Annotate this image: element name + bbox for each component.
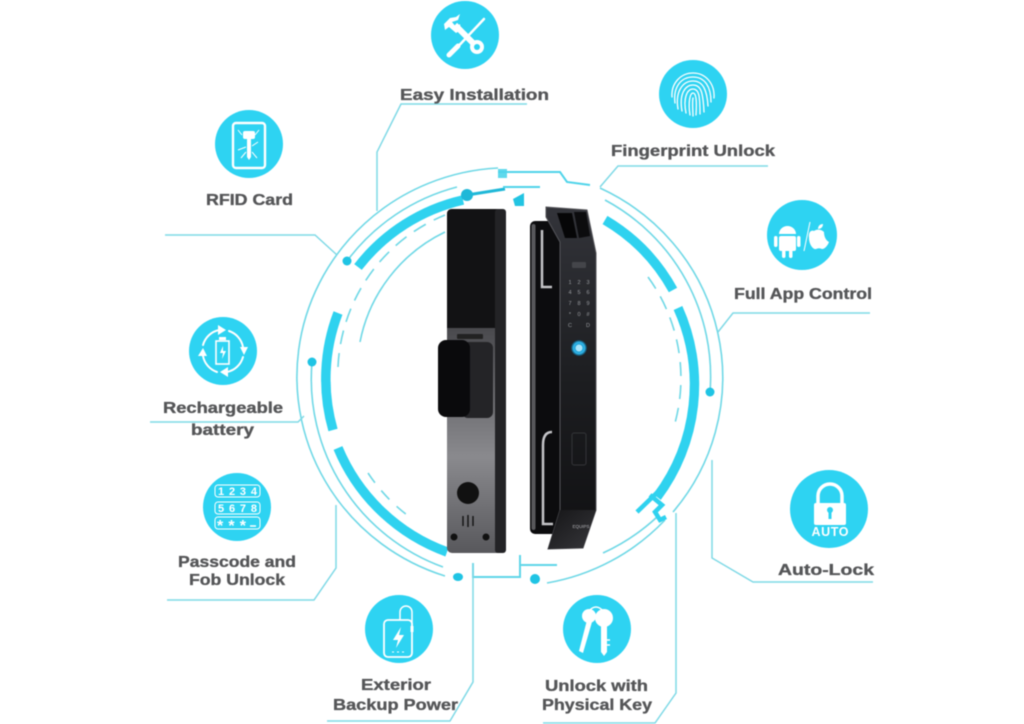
feature: unlock with physical key	[542, 595, 652, 714]
feature: unlock with physical key: Physical Key	[542, 697, 652, 714]
feature: full app control	[734, 200, 872, 303]
icon: power bank	[365, 595, 433, 663]
label: RFID Card	[206, 192, 293, 209]
icon: battery with cycle arrows	[189, 317, 257, 385]
product: exterior lock with fingerprint reader: 6	[586, 290, 590, 296]
product: exterior lock with fingerprint reader: D	[586, 323, 590, 329]
label: Full App Control	[734, 286, 872, 303]
feature: passcode and fob unlock: Fob Unlock	[189, 572, 285, 589]
label: Easy Installation	[400, 87, 549, 104]
feature: fingerprint unlock	[611, 60, 775, 160]
product: exterior lock with fingerprint reader: 4	[568, 290, 572, 296]
icon: keypad: 1234	[218, 486, 258, 498]
product: exterior lock with fingerprint reader: 8	[577, 301, 581, 307]
product: exterior lock with fingerprint reader: 5	[577, 290, 581, 296]
circuit ring graphic	[297, 168, 723, 584]
icon: android and apple	[767, 200, 837, 270]
label: Fingerprint Unlock	[611, 143, 775, 160]
product: exterior lock with fingerprint reader: 9	[586, 301, 590, 307]
product: exterior lock with fingerprint reader: 3	[586, 280, 590, 286]
label: Rechargeable	[163, 400, 283, 417]
product: interior lock panel	[438, 209, 506, 553]
icon: two keys	[563, 595, 631, 663]
product: exterior lock with fingerprint reader: *	[569, 312, 572, 318]
product: exterior lock with fingerprint reader	[530, 207, 596, 549]
feature: passcode and fob unlock	[178, 473, 296, 589]
feature: exterior backup power	[333, 595, 458, 714]
icon: keypad: 5678	[218, 503, 257, 515]
product: exterior lock with fingerprint reader: #	[586, 312, 590, 318]
feature: rechargeable battery: battery	[191, 422, 254, 439]
product: exterior lock with fingerprint reader: C	[568, 323, 572, 329]
product: exterior lock with fingerprint reader: 1	[568, 280, 572, 286]
product: exterior lock with fingerprint reader: 0	[577, 312, 581, 318]
feature: rechargeable battery	[163, 317, 283, 439]
icon: padlock auto: AUTO	[812, 525, 849, 539]
label: Passcode and	[178, 554, 296, 571]
feature: RFID card	[206, 110, 293, 209]
icon: keypad	[203, 473, 271, 541]
label: Unlock with	[545, 678, 648, 695]
product: exterior lock with fingerprint reader: EQUIPS	[572, 524, 590, 529]
product: exterior lock with fingerprint reader: 2	[577, 280, 581, 286]
feature: easy installation	[400, 1, 549, 104]
icon: keypad: ***	[217, 518, 247, 535]
icon: RFID key card	[215, 110, 283, 178]
label: Auto-Lock	[778, 562, 874, 579]
product: exterior lock with fingerprint reader: 7	[568, 301, 572, 307]
feature: auto-lock	[778, 470, 874, 579]
connector lines	[150, 104, 873, 723]
icon: wrench and screwdriver	[431, 1, 499, 69]
feature: exterior backup power: Backup Power	[333, 697, 458, 714]
icon: fingerprint	[659, 60, 727, 128]
label: Exterior	[361, 677, 431, 694]
